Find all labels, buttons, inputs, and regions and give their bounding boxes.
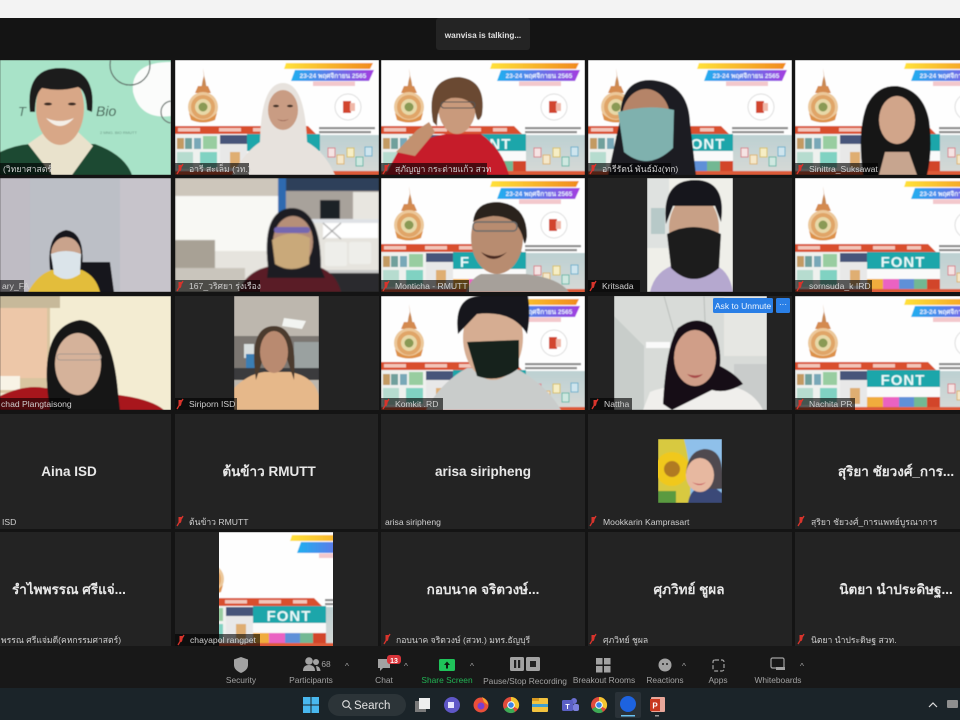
name-only tiles, row 4: สุริยา ชัยวงศ์_การ... xyxy=(838,463,954,480)
tile: science presenter: Bio xyxy=(96,103,116,119)
icon: reactions: ^ xyxy=(682,661,686,671)
name label: อารี สะเล็ม (วท.) xyxy=(189,163,251,174)
name-only tiles, row 4: arisa siripheng xyxy=(385,517,441,527)
tile: อารี xyxy=(175,60,379,175)
name-only tiles, row 4: ISD xyxy=(2,517,16,527)
icon: reactions xyxy=(646,658,686,685)
name-only tiles, row 5: กอบนาค จริตวงษ์... xyxy=(427,581,539,597)
name label: Sinittra_Suksawat xyxy=(809,164,878,174)
icon: participants xyxy=(289,657,349,685)
zoom toolbar xyxy=(0,646,960,688)
profile picture: sunflower xyxy=(658,439,722,503)
ask to unmute button: Ask to Unmute xyxy=(715,301,771,311)
icon: teams: T xyxy=(565,704,570,711)
ask to unmute button xyxy=(713,298,790,313)
tile: Monticha: F xyxy=(460,254,470,271)
tile: Nattha xyxy=(588,296,792,410)
talking indicator xyxy=(436,18,530,50)
icon: chat xyxy=(375,655,408,685)
name-only tiles, row 5: กอบนาค จริตวงษ์ (สวท.) มทร.ธัญบุรี xyxy=(396,635,531,646)
tile: Nachita: FONT xyxy=(881,372,925,389)
tile: science presenter xyxy=(0,60,171,175)
name label: chad Plangtaisong xyxy=(1,399,72,409)
tile: Sinittra xyxy=(795,60,960,175)
name-only tiles, row 4: Aina ISD xyxy=(41,464,97,479)
icon: reactions: Reactions xyxy=(646,675,684,685)
icon: breakout rooms: Breakout Rooms xyxy=(573,675,635,685)
name label xyxy=(795,280,872,292)
icon: whiteboards: ^ xyxy=(800,661,804,671)
name label: chayapol xyxy=(175,634,260,646)
icon: whiteboards: Whiteboards xyxy=(754,675,802,685)
icon: powerpoint xyxy=(650,697,665,716)
name-only tiles, row 5: ศุภวิทย์ ชูผล xyxy=(603,635,648,646)
name-only tiles, row 4: สุริยา ชัยวงศ์_การแพทย์บูรณาการ xyxy=(811,517,938,528)
icon: share screen: ^ xyxy=(470,661,474,671)
search box: Search xyxy=(354,700,390,712)
icon: firefox xyxy=(474,697,488,712)
icon: zoom active xyxy=(615,692,641,718)
name label xyxy=(795,398,855,410)
icon: share screen: Share Screen xyxy=(421,675,473,685)
icon: breakout rooms xyxy=(573,658,635,685)
name-only tiles, row 4: ต้นข้าว RMUTT xyxy=(222,464,316,479)
icon: pause/stop recording: Pause/Stop Recording xyxy=(483,676,567,686)
tile: อารีรัตน์: FONT xyxy=(681,136,725,153)
icon: whiteboards xyxy=(754,658,804,685)
icon: teams xyxy=(562,698,579,711)
system tray xyxy=(929,700,958,708)
icon: apps xyxy=(708,660,728,685)
name label xyxy=(175,398,237,410)
name-only tiles, row 5: ศุภวิทย์ ชูผล xyxy=(654,581,724,598)
window top bar xyxy=(0,0,960,18)
name label: sornsuda_k IRD xyxy=(809,281,871,291)
name label: Kritsada xyxy=(602,281,634,291)
tile: Monticha: 23-24 พฤศจิกายน 2565 xyxy=(506,190,573,198)
tile: Nachita xyxy=(795,296,960,410)
tile: Plangtaisong xyxy=(0,296,171,410)
name label xyxy=(795,163,878,175)
name label: Monticha - RMUTT xyxy=(395,281,468,291)
tile: chayapol slide: FONT xyxy=(267,608,311,625)
icon: share screen xyxy=(421,659,474,685)
tile: อารี: 23-24 พฤศจิกายน 2565 xyxy=(300,72,367,80)
icon: folder xyxy=(532,698,548,712)
icon: participants: 68 xyxy=(321,659,331,669)
tile: สุภัญญา xyxy=(381,60,585,175)
name label: Siriporn ISD xyxy=(189,399,235,409)
tile: science presenter: 2 MNG. BIO RMUTT xyxy=(100,130,137,135)
name-only tiles, row 4 xyxy=(0,414,960,529)
name label xyxy=(175,163,251,175)
tile: Monticha xyxy=(381,178,585,292)
name label: สุภัญญา กระต่ายแก้ว สวท xyxy=(395,164,492,175)
name label: Nachita PR xyxy=(809,399,852,409)
icon: powerpoint: P xyxy=(652,702,658,710)
icon: windows logo xyxy=(303,697,319,713)
name label: Komkit .RD xyxy=(395,399,438,409)
name-only tiles, row 4: arisa siripheng xyxy=(435,464,531,479)
tile: Siriporn xyxy=(175,296,379,410)
name label: 167_วริศยา รุ่งเรือง xyxy=(189,281,261,292)
tile: sornsuda xyxy=(795,178,960,292)
icon: security: Security xyxy=(226,675,257,685)
tile: chayapol slide xyxy=(219,532,333,646)
icon: participants: ^ xyxy=(345,661,349,671)
icon: chat: Chat xyxy=(375,675,394,685)
icon: chrome 2 xyxy=(591,697,607,713)
icon: chat: ^ xyxy=(404,661,408,671)
icon: meet xyxy=(444,697,460,713)
icon: security xyxy=(226,657,257,685)
name label: อารีรัตน์ พันธ์มัง(ทก) xyxy=(602,164,678,174)
name label xyxy=(175,280,261,292)
name label: Nattha xyxy=(604,399,630,409)
name label: (วิทยาศาสตร์ xyxy=(3,164,52,174)
name label xyxy=(381,280,469,292)
name-only tiles, row 5: รำไพพรรณ ศรีแจ่... xyxy=(12,581,126,597)
talking indicator: wanvisa is talking... xyxy=(444,31,521,40)
icon: apps: Apps xyxy=(708,675,728,685)
name label xyxy=(590,398,632,410)
name label xyxy=(381,398,443,410)
icon: chat: 13 xyxy=(390,658,398,665)
windows taskbar xyxy=(0,688,960,720)
ask to unmute button: ··· xyxy=(779,300,787,309)
icon: task view xyxy=(415,698,430,712)
tile: ary_FA xyxy=(0,178,171,292)
tile: วริศยา xyxy=(175,178,379,292)
tile: sornsuda: FONT xyxy=(881,254,925,271)
name-only tiles, row 4: Mookkarin Kamprasart xyxy=(603,517,690,527)
name label xyxy=(588,280,640,292)
name label: chayapol: chayapol rangpet xyxy=(190,635,257,645)
name-only tiles, row 5 xyxy=(0,532,960,646)
icon: pause/stop recording xyxy=(483,657,567,686)
tile: อารีรัตน์ xyxy=(588,60,792,175)
name-only tiles, row 5: นิตยา นำประดิษฐ สวท. xyxy=(811,635,897,646)
name-only tiles, row 5: นิตยา นำประดิษฐ... xyxy=(839,582,953,599)
icon: chrome xyxy=(503,697,519,713)
tile: อารีรัตน์: 23-24 พฤศจิกายน 2565 xyxy=(713,72,780,80)
tile: สุภัญญา: 23-24 พฤศจิกายน 2565 xyxy=(506,72,573,80)
search box xyxy=(328,694,406,716)
tile: Kritsada xyxy=(588,178,792,292)
name-only tiles, row 5: พรรณ ศรีแจ่มดี(คหกรรมศาสตร์) xyxy=(1,635,121,645)
name-only tiles, row 4: ต้นข้าว RMUTT xyxy=(189,517,249,527)
tile: Komkit: 23-24 พฤศจิกายน 2565 xyxy=(506,308,573,316)
tile: science presenter: T xyxy=(18,104,27,119)
tile: สุภัญญา: FONT xyxy=(467,136,511,153)
icon: participants: Participants xyxy=(289,675,333,685)
tile: Komkit xyxy=(381,296,585,410)
name label: ary_FA xyxy=(2,281,29,291)
